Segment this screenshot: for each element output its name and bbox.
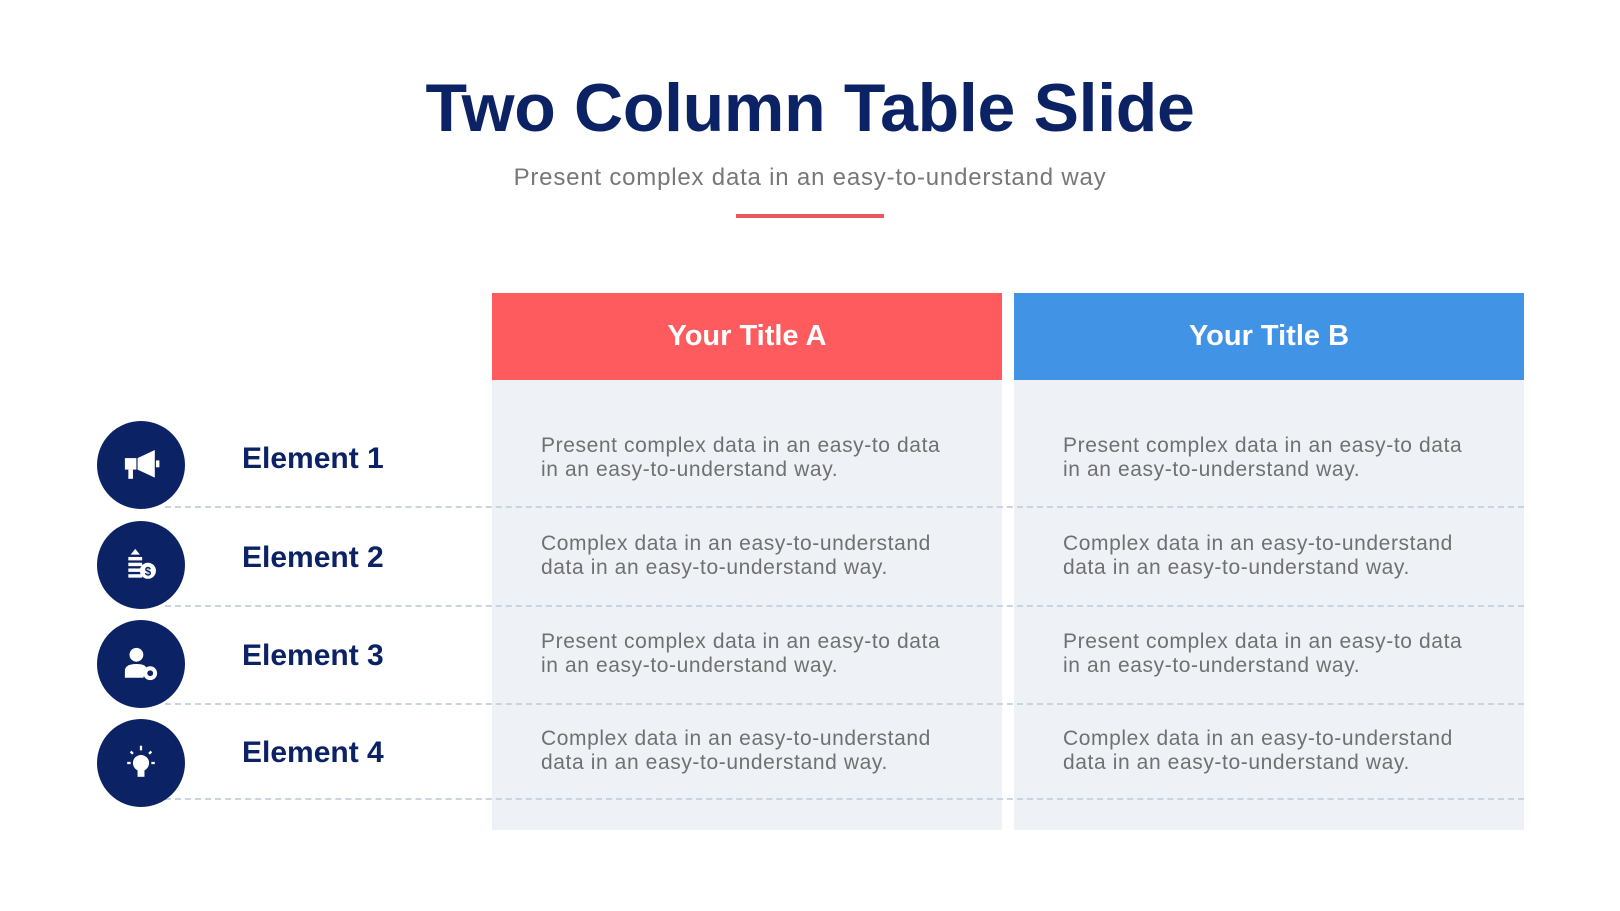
cell B4: data in an easy-to-understand way. xyxy=(1063,751,1410,774)
cell A2: Complex data in an easy-to-understand xyxy=(541,532,931,555)
label: element 3: Element 3 xyxy=(242,639,384,672)
icon: light bulb xyxy=(97,719,185,807)
cell B2: data in an easy-to-understand way. xyxy=(1063,556,1410,579)
column A background xyxy=(492,380,1002,830)
cell A3: Present complex data in an easy-to data xyxy=(541,630,940,653)
column B background xyxy=(1014,380,1524,830)
cell B4 xyxy=(1063,727,1453,774)
cell A1: in an easy-to-understand way. xyxy=(541,458,838,481)
cell A1: Present complex data in an easy-to data xyxy=(541,434,940,457)
cell B4: Complex data in an easy-to-understand xyxy=(1063,727,1453,750)
cell A4 xyxy=(541,727,931,774)
cell B3: Present complex data in an easy-to data xyxy=(1063,630,1462,653)
subtitle: Present complex data in an easy-to-understand way xyxy=(514,164,1106,191)
header A: Your Title A xyxy=(668,320,826,352)
cell B1: in an easy-to-understand way. xyxy=(1063,458,1360,481)
header B xyxy=(1014,293,1524,380)
cell A2 xyxy=(541,532,931,579)
cell B1 xyxy=(1063,434,1462,481)
cell B3: in an easy-to-understand way. xyxy=(1063,654,1360,677)
cell A3 xyxy=(541,630,940,677)
header B: Your Title B xyxy=(1189,320,1349,352)
accent line xyxy=(736,214,884,218)
icon: coins: $ xyxy=(145,566,152,578)
title: Two Column Table Slide xyxy=(425,70,1195,146)
label: element 1: Element 1 xyxy=(242,442,384,475)
cell B1: Present complex data in an easy-to data xyxy=(1063,434,1462,457)
cell A1 xyxy=(541,434,940,481)
label: element 4: Element 4 xyxy=(242,736,384,769)
cell A4: data in an easy-to-understand way. xyxy=(541,751,888,774)
cell A2: data in an easy-to-understand way. xyxy=(541,556,888,579)
cell A4: Complex data in an easy-to-understand xyxy=(541,727,931,750)
icon: user gear xyxy=(97,620,185,708)
icon: megaphone xyxy=(97,421,185,509)
header A xyxy=(492,293,1002,380)
icon: coins xyxy=(97,521,185,609)
cell B2 xyxy=(1063,532,1453,579)
label: element 2: Element 2 xyxy=(242,541,384,574)
cell A3: in an easy-to-understand way. xyxy=(541,654,838,677)
cell B3 xyxy=(1063,630,1462,677)
cell B2: Complex data in an easy-to-understand xyxy=(1063,532,1453,555)
